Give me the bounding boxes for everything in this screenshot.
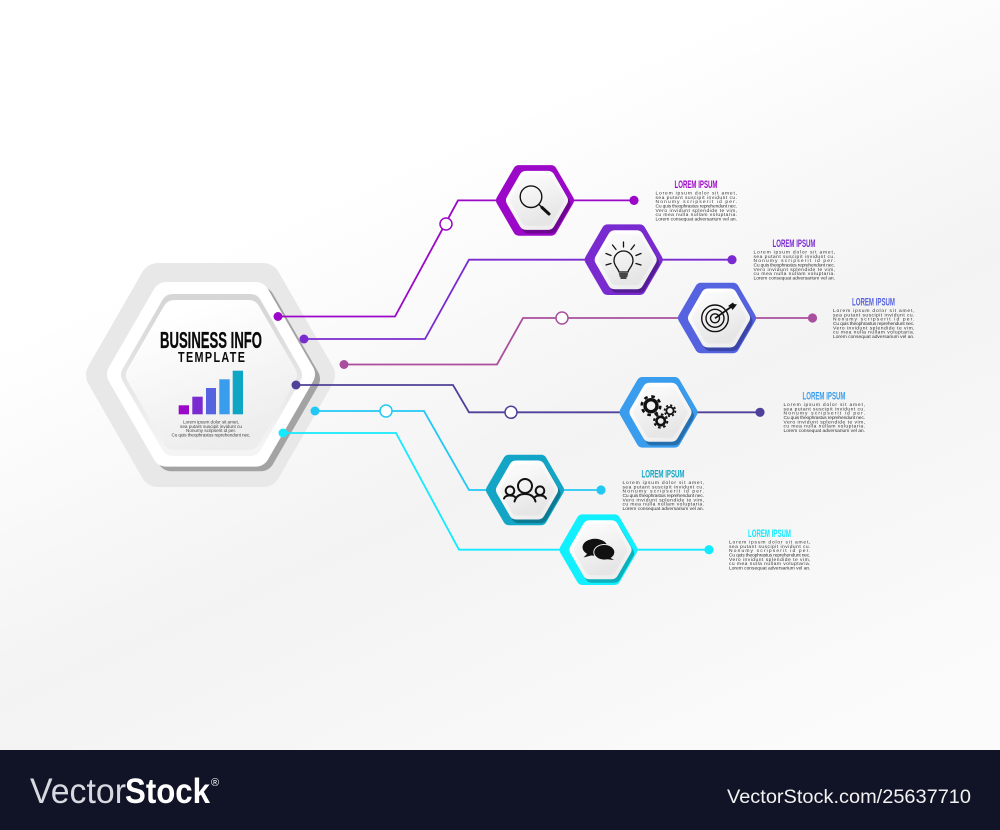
text block 6: Lorem consequat adversarium vel an. — [729, 566, 810, 572]
text block 1: Cu quis theophrastus reprehendunt nec. — [656, 204, 737, 210]
text block 5: sea putant suscipit invidunt cu. — [622, 484, 704, 490]
hexagon drop shadow — [126, 301, 306, 457]
text block 3: LOREM IPSUM — [852, 296, 895, 308]
text block 3: Nonumy scripserit id per. — [833, 317, 914, 323]
text block 4: sea putant suscipit invidunt cu. — [784, 406, 865, 412]
text block 2: Vero invidunt splendide te vim, — [754, 267, 835, 273]
text block 3: cu mea nulla nullam voluptaria. — [833, 330, 914, 336]
footer logo: Vector — [30, 772, 126, 811]
text block 5: Nonumy scripserit id per. — [622, 489, 704, 495]
text block 3 — [833, 296, 914, 340]
connector 6 — [278, 428, 714, 554]
text block 5: cu mea nulla nullam voluptaria. — [622, 502, 704, 508]
text block 1: sea putant suscipit invidunt cu. — [656, 195, 737, 201]
text block 3: sea putant suscipit invidunt cu. — [833, 312, 914, 318]
text block 2: LOREM IPSUM — [772, 238, 816, 250]
text block 6: Nonumy scripserit id per. — [729, 548, 810, 554]
text block 6: sea putant suscipit invidunt cu. — [729, 544, 810, 550]
text block 4: Cu quis theophrastus reprehendunt nec. — [784, 415, 865, 421]
text block 4: LOREM IPSUM — [802, 390, 846, 402]
text block 4: Lorem consequat adversarium vel an. — [784, 428, 865, 434]
text block 6: Lorem ipsum dolor sit amet, — [729, 540, 810, 546]
connector 4 — [292, 380, 765, 418]
footer logo — [30, 772, 219, 811]
text block 1: cu mea nulla nullam voluptaria. — [656, 212, 737, 218]
icon: group of people — [504, 479, 546, 502]
text block 6: cu mea nulla nullam voluptaria. — [729, 561, 810, 567]
text block 1 — [656, 179, 737, 222]
text block 6: Vero invidunt splendide te vim, — [729, 557, 810, 563]
text block 5: Lorem ipsum dolor sit amet, — [622, 480, 704, 486]
icon: magnifying glass — [520, 186, 549, 214]
text block 2 — [754, 238, 835, 282]
connector 5 — [310, 405, 606, 495]
central caption: Cu quis theophrastus reprehendunt nec. — [172, 432, 250, 437]
text block 6 — [729, 528, 810, 572]
subtitle: template: TEMPLATE — [178, 348, 245, 365]
node 3: target — [684, 289, 750, 347]
icon: light bulb — [606, 242, 641, 278]
text block 4 — [784, 390, 865, 434]
white hexagon layer — [121, 296, 301, 453]
text block 3: Lorem ipsum dolor sit amet, — [833, 308, 914, 314]
text block 6: LOREM IPSUM — [748, 528, 791, 540]
node 4: gears — [626, 383, 692, 442]
node 2: idea — [591, 230, 657, 289]
text block 3: Cu quis theophrastus reprehendunt nec. — [833, 321, 914, 327]
text block 6: Cu quis theophrastus reprehendunt nec. — [729, 552, 810, 558]
node 6: chat — [566, 520, 632, 579]
text block 5: Vero invidunt splendide te vim, — [622, 497, 704, 503]
text block 5: Cu quis theophrastus reprehendunt nec. — [622, 493, 704, 499]
central caption: sea putant suscipit invidunt cu — [180, 424, 242, 429]
text block 1: LOREM IPSUM — [674, 179, 718, 191]
text block 4: cu mea nulla nullam voluptaria. — [784, 424, 865, 430]
text block 5: Lorem consequat adversarium vel an. — [622, 506, 704, 512]
text block 2: Cu quis theophrastus reprehendunt nec. — [754, 262, 835, 268]
panel: central hexagon — [104, 281, 317, 469]
icon: target with arrow — [702, 302, 737, 332]
text block 1: Nonumy scripserit id per. — [656, 199, 737, 205]
icon: gears — [642, 396, 675, 428]
text block 4: Vero invidunt splendide te vim, — [784, 419, 865, 425]
footer image id: VectorStock.com/25637710 — [727, 787, 971, 808]
central caption: Lorem ipsum dolor sit amet, — [183, 420, 239, 424]
inner hexagon face — [138, 312, 285, 438]
footer band — [0, 750, 1000, 830]
text block 5: LOREM IPSUM — [642, 468, 684, 480]
text block 5 — [622, 468, 704, 512]
connector 2 — [300, 255, 737, 344]
central caption: Nonumy scripserit id per. — [186, 428, 236, 433]
icon: speech bubbles — [582, 539, 615, 560]
text block 1: Vero invidunt splendide te vim, — [656, 208, 737, 214]
text block 1: Lorem consequat adversarium vel an. — [656, 216, 737, 222]
node 5: team — [492, 461, 558, 519]
text block 2: Nonumy scripserit id per. — [754, 258, 835, 264]
inner hexagon ring — [133, 306, 290, 444]
text block 4: Lorem ipsum dolor sit amet, — [784, 402, 865, 408]
outer hexagon frame — [104, 281, 317, 469]
text block 2: Lorem consequat adversarium vel an. — [754, 276, 835, 282]
text block 3: Lorem consequat adversarium vel an. — [833, 334, 914, 340]
text block 2: Lorem ipsum dolor sit amet, — [754, 250, 835, 256]
text block 4: Nonumy scripserit id per. — [784, 411, 865, 417]
title: business info: BUSINESS INFO — [160, 327, 262, 353]
text block 3: Vero invidunt splendide te vim, — [833, 325, 914, 331]
text block 1: Lorem ipsum dolor sit amet, — [656, 190, 737, 196]
text block 2: sea putant suscipit invidunt cu. — [754, 254, 835, 260]
bar chart — [179, 371, 243, 414]
node 1: search — [502, 171, 568, 230]
footer logo: Stock — [125, 772, 210, 811]
text block 2: cu mea nulla nullam voluptaria. — [754, 271, 835, 277]
footer logo: ® — [211, 777, 219, 789]
connector 1 — [274, 196, 639, 321]
connector 3 — [340, 312, 817, 369]
central caption — [172, 420, 250, 437]
